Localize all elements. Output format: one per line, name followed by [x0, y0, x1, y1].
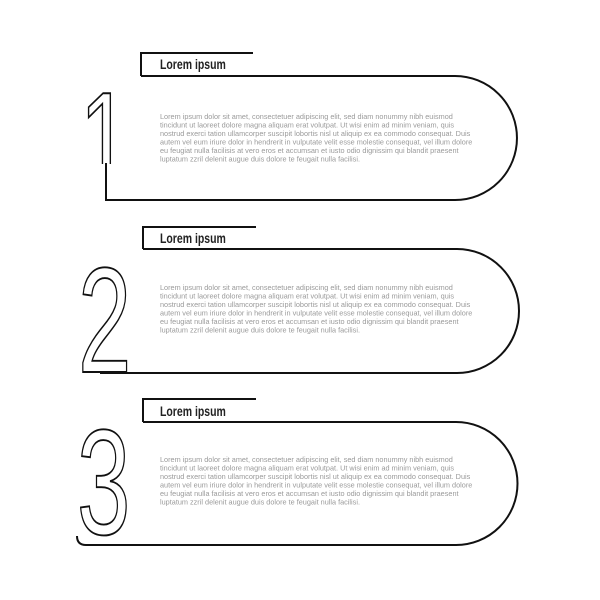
- box outline 2: [100, 249, 519, 373]
- number 1: 1: [80, 67, 130, 205]
- body text 3: Lorem ipsum dolor sit amet, consectetuer adipiscing elit, sed diam nonummy nibh euismod: [160, 455, 453, 464]
- body text 3: luptatum zzril delenit augue duis dolore te feugait nulla facilisi.: [160, 498, 360, 506]
- panel: step 3: [77, 398, 518, 566]
- body text 2: tincidunt ut laoreet dolore magna aliquam erat volutpat. Ut wisi enim ad minim veniam, quis: [160, 292, 454, 300]
- body text 1: Lorem ipsum dolor sit amet, consectetuer adipiscing elit, sed diam nonummy nibh euismod: [160, 112, 453, 121]
- box outline 1: [106, 76, 517, 200]
- body text 1: eu feugiat nulla facilisis at vero eros et accumsan et iusto odio dignissim qui blandit praesent: [160, 146, 459, 155]
- body text 2: autem vel eum iriure dolor in hendrerit in vulputate velit esse molestie consequat, vel illum dolore: [160, 308, 472, 318]
- body text 3: eu feugiat nulla facilisis at vero eros et accumsan et iusto odio dignissim qui blandit praesent: [160, 489, 459, 498]
- body text 3: autem vel eum iriure dolor in hendrerit in vulputate velit esse molestie consequat, vel illum dolore: [160, 480, 472, 490]
- number 2: 2: [78, 236, 131, 404]
- body text 2: luptatum zzril delenit augue duis dolore te feugait nulla facilisi.: [160, 326, 360, 334]
- heading 3: Lorem ipsum: [160, 404, 226, 419]
- body text 2: Lorem ipsum dolor sit amet, consectetuer adipiscing elit, sed diam nonummy nibh euismod: [160, 283, 453, 292]
- heading 1: Lorem ipsum: [160, 57, 226, 72]
- header bracket 2: [143, 227, 256, 249]
- header bracket 3: [143, 399, 256, 422]
- body text 2: nostrud exerci tation ullamcorper suscipit lobortis nisl ut aliquip ex ea commodo consequat. Duis: [160, 300, 471, 309]
- body text 2: eu feugiat nulla facilisis at vero eros et accumsan et iusto odio dignissim qui blandit praesent: [160, 317, 459, 326]
- panel: step 1: [80, 53, 517, 205]
- heading 2: Lorem ipsum: [160, 231, 226, 246]
- body text 1: luptatum zzril delenit augue duis dolore te feugait nulla facilisi.: [160, 154, 360, 164]
- body text 1: autem vel eum iriure dolor in hendrerit in vulputate velit esse molestie consequat, vel illum dolore: [160, 138, 472, 146]
- body text 3: tincidunt ut laoreet dolore magna aliquam erat volutpat. Ut wisi enim ad minim veniam, quis: [160, 464, 454, 472]
- body text 3: nostrud exerci tation ullamcorper suscipit lobortis nisl ut aliquip ex ea commodo consequat. Duis: [160, 472, 471, 481]
- body text 1: nostrud exerci tation ullamcorper suscipit lobortis nisl ut aliquip ex ea commodo consequat. Duis: [160, 129, 471, 138]
- header bracket 1: [141, 53, 253, 76]
- panel: step 2: [78, 227, 519, 404]
- box outline 3: [77, 422, 518, 545]
- number 3: 3: [77, 398, 130, 566]
- body text 1: tincidunt ut laoreet dolore magna aliquam erat volutpat. Ut wisi enim ad minim veniam, quis: [160, 120, 454, 130]
